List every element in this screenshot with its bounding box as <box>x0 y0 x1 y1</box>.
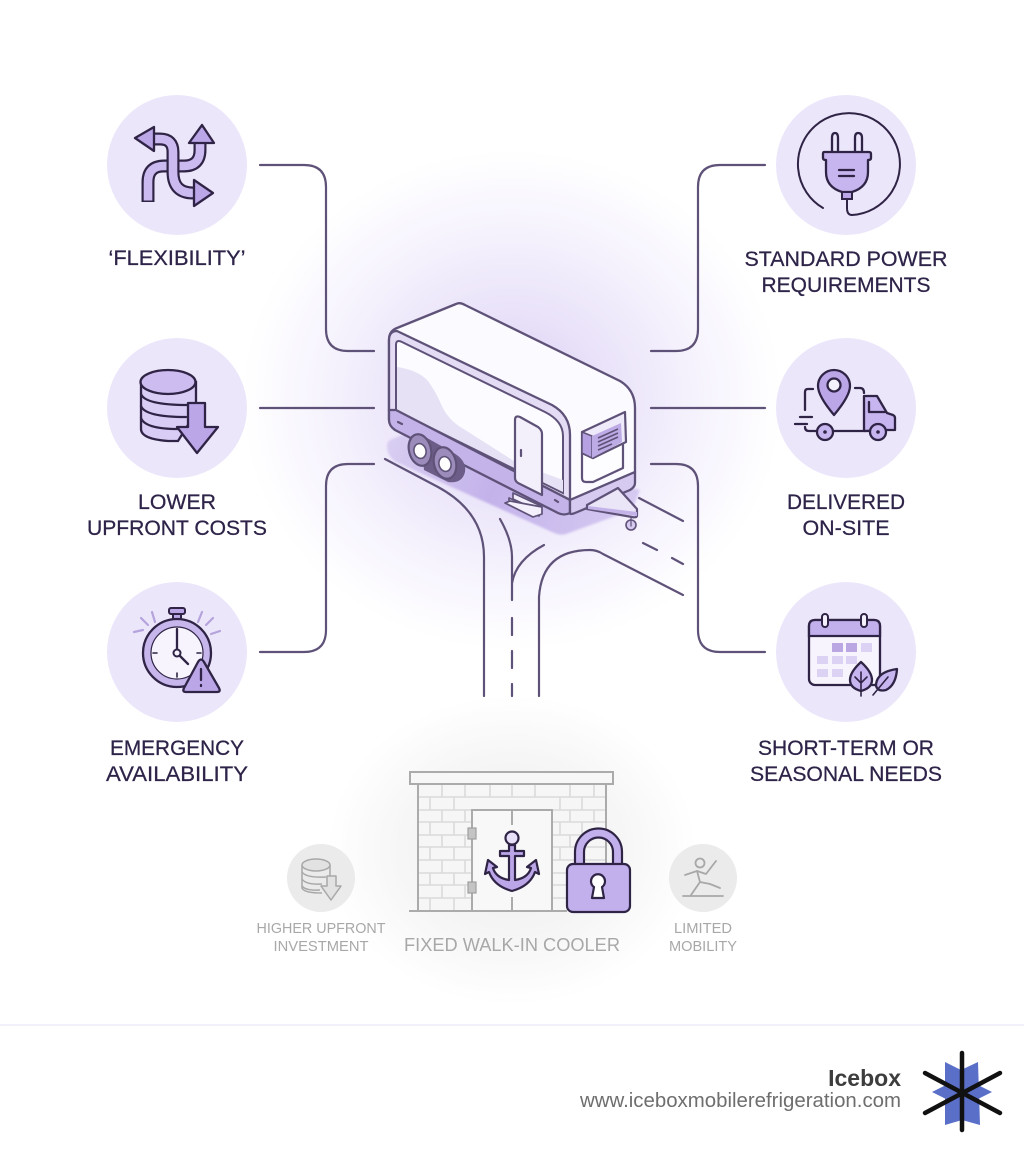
website url: www.iceboxmobilerefrigeration.com <box>579 1090 901 1112</box>
connector lines <box>260 165 765 652</box>
cooler door <box>468 810 552 911</box>
trailer wheels <box>405 432 465 482</box>
label: LOWER <box>138 491 216 514</box>
label: SHORT-TERM OR <box>758 737 934 760</box>
label: DELIVERED <box>787 491 905 514</box>
label: ‘FLEXIBILITY’ <box>108 247 246 270</box>
footer brand <box>579 1053 1000 1130</box>
label: AVAILABILITY <box>106 763 248 786</box>
label: LIMITED <box>674 920 732 937</box>
icon circle <box>776 338 916 478</box>
road <box>385 459 683 696</box>
trailer steps <box>505 493 542 517</box>
icon: padlock <box>567 828 630 912</box>
trailer hitch <box>587 488 637 530</box>
label: FIXED WALK-IN COOLER <box>404 935 620 955</box>
trailer body <box>389 303 635 514</box>
icon: crossing arrows <box>135 125 214 206</box>
drawback: higher upfront investment <box>256 844 386 955</box>
label <box>87 491 267 540</box>
icon: stopwatch with warning <box>134 608 220 692</box>
label <box>256 920 386 955</box>
item: emergency availability <box>106 582 248 786</box>
item: flexibility <box>107 95 247 270</box>
label: UPFRONT COSTS <box>87 517 267 540</box>
grey icon circle <box>669 844 737 912</box>
label <box>669 920 737 955</box>
icon: calendar and leaves <box>809 614 897 696</box>
item: delivered on-site <box>776 338 916 540</box>
label <box>787 491 905 540</box>
drawback: limited mobility <box>669 844 737 955</box>
icon circle <box>107 95 247 235</box>
icon: grey coin stack <box>302 859 341 900</box>
label: STANDARD POWER <box>744 248 948 271</box>
trailer ground shadow <box>387 432 640 535</box>
icon: coin stack with down arrow <box>140 370 218 453</box>
icon: grey running figure <box>683 858 723 896</box>
label: REQUIREMENTS <box>762 274 930 297</box>
icon circle <box>107 338 247 478</box>
trailer door <box>515 416 542 495</box>
brand name: Icebox <box>828 1065 901 1091</box>
cooler brick wall <box>409 772 613 911</box>
icon circle <box>776 95 916 235</box>
icon circle <box>776 582 916 722</box>
refrigeration unit <box>582 412 626 482</box>
icon: delivery truck and pin <box>795 370 895 440</box>
label: ON-SITE <box>802 517 890 540</box>
logo: snowflake <box>925 1053 1000 1130</box>
item: standard power requirements <box>744 95 948 297</box>
label: SEASONAL NEEDS <box>750 763 942 786</box>
label <box>106 737 248 786</box>
item: short-term or seasonal needs <box>750 582 942 786</box>
icon: anchor <box>485 832 539 891</box>
item: lower upfront costs <box>87 338 267 540</box>
label: MOBILITY <box>669 938 737 955</box>
fixed walk-in cooler <box>404 772 630 955</box>
label: HIGHER UPFRONT <box>256 920 386 937</box>
icon: plug and cord <box>798 113 900 215</box>
label: EMERGENCY <box>110 737 244 760</box>
label <box>750 737 942 786</box>
mobile refrigeration trailer <box>387 303 640 535</box>
grey icon circle <box>287 844 355 912</box>
icon circle <box>107 582 247 722</box>
label <box>744 248 948 297</box>
label: INVESTMENT <box>274 938 368 955</box>
